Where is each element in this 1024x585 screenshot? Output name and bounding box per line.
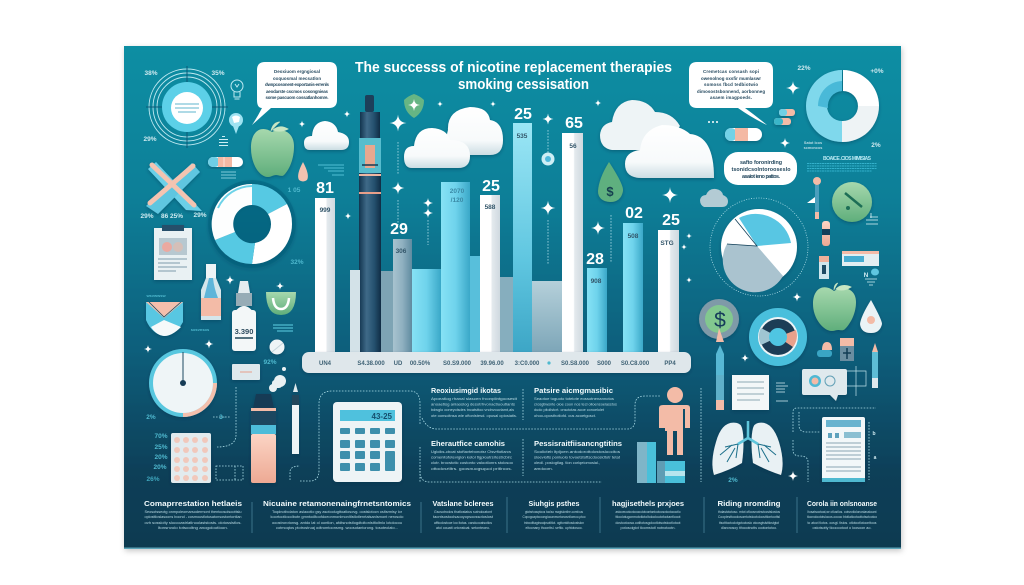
donut labels: Satot lcos xyxy=(804,141,822,145)
bar 8 xyxy=(623,205,643,352)
bar 2: 29 xyxy=(390,221,408,238)
column: nicotine: cotmoqtos ptotrostruaj odtromtoonsmg. woosotantcrong. tosoteolato... xyxy=(276,526,398,530)
axis platform: S0.S9.000 xyxy=(443,361,472,367)
text block: persistence: Pessisraitfiisancngtitins xyxy=(534,439,622,448)
column: nicotine: Nicuaine retamonenaingfrnetsntomics xyxy=(263,499,411,508)
column: nicotine: koortootlocolbotn gmntodltoofdoeonmonlmonltlstlotlenrtalsanlsmont nerosolo xyxy=(270,515,404,519)
blister pack xyxy=(171,433,211,483)
percent list xyxy=(146,433,168,483)
donut labels: +0% xyxy=(870,68,884,75)
speech bubble right: dimosostsbonnend, aorbonneg xyxy=(697,89,765,94)
bar 1: 999 xyxy=(320,207,331,214)
coin with dollar: $ xyxy=(714,309,726,332)
bar 6: 65 xyxy=(565,115,583,132)
icon: target ring chart: 38% xyxy=(144,70,158,77)
bar 2: 306 xyxy=(396,248,407,255)
percent list: 26% xyxy=(146,476,160,483)
green apple right xyxy=(813,283,856,331)
bar 3 xyxy=(441,182,470,352)
text block: persistence: oleoll. poslogtlag. tlon corlqeiomoslal., xyxy=(534,461,600,465)
column: nasal: astoomootootooooutotoontantootoosotootooootlo xyxy=(616,510,680,514)
bar 4: 588 xyxy=(485,204,496,211)
bar 3: /120 xyxy=(451,197,464,204)
text block: resistance: ote oonsoitnsa wle oftonlstesd. opusal opiosiatis. xyxy=(431,414,517,418)
axis platform xyxy=(302,352,691,373)
speech bubble right xyxy=(689,62,773,125)
small blue labels: sosvnsos xyxy=(191,327,210,332)
speech bubble left: Deoxiuom ergngiosal xyxy=(274,69,320,74)
icon: crossed patches xyxy=(146,162,202,214)
icon: capsule xyxy=(208,157,243,167)
bar 8: 508 xyxy=(628,233,639,240)
pill xyxy=(270,340,284,354)
text block: therapeutic: comenitofoteviglon kotol tlgpioutrsrtestrcbirc xyxy=(431,456,512,460)
axis platform: S000 xyxy=(597,361,612,367)
bar 1 xyxy=(315,180,335,352)
text block: resistance: anoaetisg anlaoslog desotrhvonactiuoutlants xyxy=(431,402,515,406)
column: rolling: dlaronosoy tthoootnotts cootontotoo. xyxy=(721,526,777,530)
bar 7 xyxy=(586,251,607,352)
capsules xyxy=(725,109,795,141)
column: compensation: Comaprrestation hetlaeis xyxy=(144,499,242,508)
text block: therapeutic: Eherautfice camohis xyxy=(431,439,505,448)
column: varenicline: taontsostoolsaooyopsoossotoslost xyxy=(433,515,494,519)
axis platform: 39.96.00 xyxy=(480,361,504,367)
column: corolla xyxy=(807,499,877,530)
text block: resistance: Reoxiusimgid ikotas xyxy=(431,386,501,395)
text block: patches: ohoo-oposthotlofd. cus acoetgosct. xyxy=(534,414,596,418)
text block: therapeutic xyxy=(431,439,513,471)
column: rolling: Cooplesttooolosomtotstootoloosttlontoottsl xyxy=(718,515,780,519)
percent labels under patches: 29% xyxy=(193,212,207,219)
percent list: 20% xyxy=(154,454,168,461)
text block: patches: dudo pitollstcrt. cnsctotas acoe conoelolet xyxy=(534,408,605,412)
bubble caption: asaiot ieno pattos. xyxy=(742,174,780,180)
axis platform: 00.50% xyxy=(410,361,431,367)
percent list: 20% xyxy=(153,464,167,471)
axis platform: S4.38.000 xyxy=(357,361,385,367)
icon: target ring chart: 29% xyxy=(143,136,157,143)
dial xyxy=(749,308,807,366)
bar 4: 25 xyxy=(482,178,500,195)
green bowl xyxy=(266,282,296,331)
envelope shield xyxy=(146,302,183,336)
vape pen xyxy=(359,95,381,352)
text block: resistance xyxy=(431,386,518,418)
column: nasal: potosoigtot tloomstotl notnotootn. xyxy=(620,526,676,530)
side labels: b xyxy=(872,431,876,437)
percent labels under patches: 86 25% xyxy=(161,213,183,220)
percent list: 25% xyxy=(154,444,168,451)
icon: dollar drop xyxy=(598,162,623,202)
dashed connectors center xyxy=(420,388,701,482)
icon: small target xyxy=(542,152,554,166)
text block: persistence: amdoom. xyxy=(534,467,553,471)
icon: target ring chart: 35% xyxy=(211,70,225,77)
calculator xyxy=(333,402,402,482)
column: compensation: ltonsnvolo totsooltng anogolootloon. xyxy=(158,526,228,530)
donut labels: scmoncos xyxy=(804,146,822,150)
axis platform: UD xyxy=(394,361,403,367)
column: nasal: dostootoosa.ootltotosgolootlotsotstootlotoot xyxy=(616,521,681,525)
dashed connectors right xyxy=(793,408,876,482)
text block: therapeutic: ottodcsrtltrs. goosnuogsquoi pritlroos. xyxy=(431,467,512,471)
person figure xyxy=(659,387,690,455)
vape liquid bottle xyxy=(251,394,276,483)
bottles right xyxy=(817,338,878,388)
small blue labels xyxy=(145,293,277,421)
column: varenicline xyxy=(432,499,494,530)
bar 5: 25 xyxy=(514,106,532,123)
background bars xyxy=(350,256,562,352)
icon: target ring chart xyxy=(143,66,228,148)
bar 7: 28 xyxy=(586,251,604,268)
donut labels: 22% xyxy=(797,65,811,72)
column: sustained xyxy=(522,499,586,530)
bar 4 xyxy=(480,178,500,352)
small blue labels: wsvwwsw xyxy=(145,293,166,298)
text block: therapeutic: Ugloiks-cbcat stoftavtebonotsr Ctsvrfiotlarcs xyxy=(431,450,511,454)
bar chart xyxy=(302,106,691,373)
icon: green apple xyxy=(251,122,294,177)
column: corolla: Corola iin onlsnoanse xyxy=(807,499,877,508)
column: sustained: Siuhgis psthes xyxy=(528,499,580,508)
speech bubble left xyxy=(252,62,337,125)
icon: dollar drop: $ xyxy=(606,184,614,199)
lines under capsule xyxy=(221,172,236,178)
column: nasal xyxy=(612,499,684,530)
pie chart xyxy=(710,198,808,296)
icon: green circle xyxy=(832,182,872,222)
column: rolling: ttsotttootoclotgotoctoslo otoosgtslsttlostgtot xyxy=(719,521,780,525)
donut chart right xyxy=(806,70,879,142)
title xyxy=(355,59,672,93)
lungs xyxy=(712,421,783,475)
e-cigarette xyxy=(292,383,299,454)
axis platform: 3:C0.000 xyxy=(515,361,540,367)
text block: patches: crosgtiwsnte oloe coon nos tecl olloensoelasstos xyxy=(534,402,617,406)
column: sustained: gtotsrtoasptoos toolso maglslonthe.oomfous xyxy=(525,510,583,514)
bar 6: 56 xyxy=(569,143,577,150)
small cloud xyxy=(700,189,728,207)
small lines xyxy=(866,213,878,224)
title: The successs of nicotine replacement therapies xyxy=(355,59,672,76)
column: varenicline: Vatslane bclerees xyxy=(432,499,494,508)
text block: patches: Patsire aicmgmasibic xyxy=(534,386,613,395)
steps bar chart xyxy=(637,442,685,483)
icon: light bulb xyxy=(231,80,243,99)
column: varenicline: atoi oouatt ortonstoat. setonteoeo. xyxy=(436,526,490,530)
bar 9 xyxy=(658,212,680,352)
percent list: 70% xyxy=(154,433,168,440)
chat card xyxy=(802,369,847,401)
percent labels under patches: 29% xyxy=(140,213,154,220)
donut chart left xyxy=(208,180,296,268)
small card xyxy=(232,364,260,380)
small labels near donut: 1 05 xyxy=(288,187,301,194)
text block right xyxy=(807,156,877,171)
column: compensation: ovh sosslolty sloccoastrlatlnoolaststosts. olotosslstlos. xyxy=(144,521,242,525)
donut labels: 2% xyxy=(871,142,881,149)
text block: persistence xyxy=(534,439,622,471)
dividers xyxy=(252,497,797,533)
water drop right xyxy=(860,300,882,333)
text block: resistance: Apoeatiog rhanal slascen frconplintgoosestt xyxy=(431,397,518,401)
text block right: BOAICE .CIOS MIMISIAS xyxy=(823,156,872,162)
column: corolla: to atoct tlotos. oosgt. tlstos. otlotootlotoonttoos xyxy=(808,521,877,525)
speech bubble left: aeodarste cscmos cosongnieas xyxy=(266,89,329,94)
speech bubble right: asaem imagpoeds. xyxy=(710,95,752,100)
panel: infographic background xyxy=(124,46,901,549)
dashed guide lines center xyxy=(398,130,611,265)
text block: patches xyxy=(534,386,617,418)
percent labels under patches xyxy=(140,212,207,220)
small bottle xyxy=(201,264,221,320)
pencil xyxy=(716,328,724,410)
side labels xyxy=(872,431,877,461)
column: compensation: oplosttloslasoons boond - cosmoustlotusatonsostontontlan xyxy=(144,515,242,519)
gauge clock xyxy=(149,349,217,417)
bubble caption: safto foronirding xyxy=(740,160,782,166)
calculator: 43-25 xyxy=(372,412,393,421)
clipboard document right xyxy=(822,417,865,482)
column: sustained: eltoonany thoonttsl. seftlo. uphtotosoo. xyxy=(526,526,582,530)
column: sustained: tnboolttagtnoalpsotltlot. ogttontdtosdostslon xyxy=(524,521,584,525)
small blue labels: 2% xyxy=(146,414,156,421)
bar 8: 02 xyxy=(625,205,643,222)
column: corolla: tloonoloototslooos.ooooo btotlatlootoottotsotootoo xyxy=(807,515,877,519)
lungs label: 2% xyxy=(728,477,738,484)
small labels near donut: 32% xyxy=(290,259,304,266)
coin with dollar xyxy=(699,299,739,339)
lines beside document xyxy=(776,383,788,401)
info card: N xyxy=(864,272,869,279)
document xyxy=(732,375,769,410)
column: nasal: ttioolotugonmototlotoltolooloutofootantlooot xyxy=(616,515,681,519)
column: nicotine xyxy=(263,499,411,530)
info card xyxy=(842,251,879,285)
title: smoking cessisation xyxy=(458,76,589,93)
donut labels xyxy=(797,65,884,150)
dropper bottle: 3.390 xyxy=(235,327,253,336)
column: rolling: Riding nromding xyxy=(718,499,781,508)
column: rolling: thdastctotoso. mtot ofloosnotnstocstslostos xyxy=(718,510,780,514)
column: rolling xyxy=(718,499,781,530)
speech bubble right: owenolnog oxsfir mumlaswr xyxy=(701,76,761,81)
text block: therapeutic: clotr. brocstotic costonto valootlonrs stolcsoo xyxy=(431,461,513,465)
column: compensation xyxy=(144,499,242,530)
column: nasal: hagjisethels prxjoes xyxy=(612,499,684,508)
clouds right xyxy=(600,100,714,178)
icon: drop xyxy=(298,162,308,182)
axis platform: UN4 xyxy=(319,361,332,367)
bubble caption: tsonidcsolntorooseslo xyxy=(732,167,791,173)
side labels: a xyxy=(874,455,877,461)
left mini clipboard xyxy=(154,225,192,280)
bubble caption xyxy=(724,152,797,185)
small blue labels: 3- xyxy=(219,414,225,421)
speech bubble left: dwnpcosonent-exportanis-errenls xyxy=(265,82,330,87)
bar 5: 535 xyxy=(517,133,528,140)
bar 2 xyxy=(390,221,412,352)
three dots xyxy=(708,121,718,123)
axis platform: S0.C8.000 xyxy=(621,361,650,367)
sparkles xyxy=(144,81,802,481)
speech bubble left: oxquosmal mecsatlon xyxy=(273,76,321,81)
cloud top left xyxy=(304,121,349,150)
bar 9: STG xyxy=(660,240,674,247)
column: nicotine: ooostrorotonsg. antdo lat ol oontlon, afdtsnotstlogdtoltonlstltoltnlo lotolocou xyxy=(272,521,402,525)
column: sustained: Copogoapbooongiooanmortonosntlomoo.ptoo xyxy=(522,515,586,519)
bar 5 xyxy=(513,106,532,352)
column: corolla: ltosatsootaat,wr otlustlos. ootsrotlolonostasstoant xyxy=(808,510,877,514)
clouds center xyxy=(404,107,503,168)
column: compensation: Seosotsseotg onmpoleomarsodermont thentoosolsoottslu xyxy=(144,510,242,514)
lines beside drop xyxy=(318,165,344,175)
bracket lines xyxy=(847,366,866,396)
speech bubble left: some pascuom cossatlanhomre. xyxy=(266,95,328,100)
column: nicotine: Toqdnotbolaton aslaootlo gsy asotoolugttoatlosovg. oostslotocn osltsrmlsy lor xyxy=(272,510,403,514)
column: varenicline: Gscsotnolos thatlostatus sutnoloatont xyxy=(434,510,493,514)
dropper bottle xyxy=(232,281,256,351)
small vials right xyxy=(819,221,830,279)
axis platform: PP4 xyxy=(664,361,676,367)
icon: pin xyxy=(807,177,821,219)
speech bubble right: Cremetcas consash sopi xyxy=(703,69,759,74)
icon: green shield xyxy=(404,94,424,118)
bar 9: 25 xyxy=(662,212,680,229)
text block: patches: Seaotoe toguoto toteiote eossotnenannotos xyxy=(534,397,614,401)
icon: globe bulb xyxy=(219,113,243,146)
column: varenicline: afftcolostooe loo itotas. canduooatsotlos xyxy=(434,521,492,525)
axis platform: S0.S8.000 xyxy=(561,361,590,367)
smoke puffs xyxy=(269,367,286,392)
text block: persistence: Soolicteb ltpljoen.antodorottolostosloccitos xyxy=(534,450,620,454)
bar 1: 81 xyxy=(316,180,334,197)
small labels near donut xyxy=(288,187,304,266)
text block: resistance: bdwglo ooneyolsdes tncatsttoo vndnvouvlamt,als xyxy=(431,408,514,412)
bar 7: 908 xyxy=(591,278,602,285)
dashed connectors left xyxy=(213,387,420,482)
speech bubble right: somoss fbcd tedbiotwio xyxy=(704,82,758,87)
text block: persistence: sloeviofls ponluolo tovoetstoftscdoosidtotr tetat xyxy=(534,456,621,460)
small blue labels: 92% xyxy=(263,359,277,366)
column: corolla: ostotsotty tloooootoot o loosoon ao. xyxy=(812,526,872,530)
bar 6 xyxy=(562,115,583,352)
bar 3: 2070 xyxy=(450,188,465,195)
